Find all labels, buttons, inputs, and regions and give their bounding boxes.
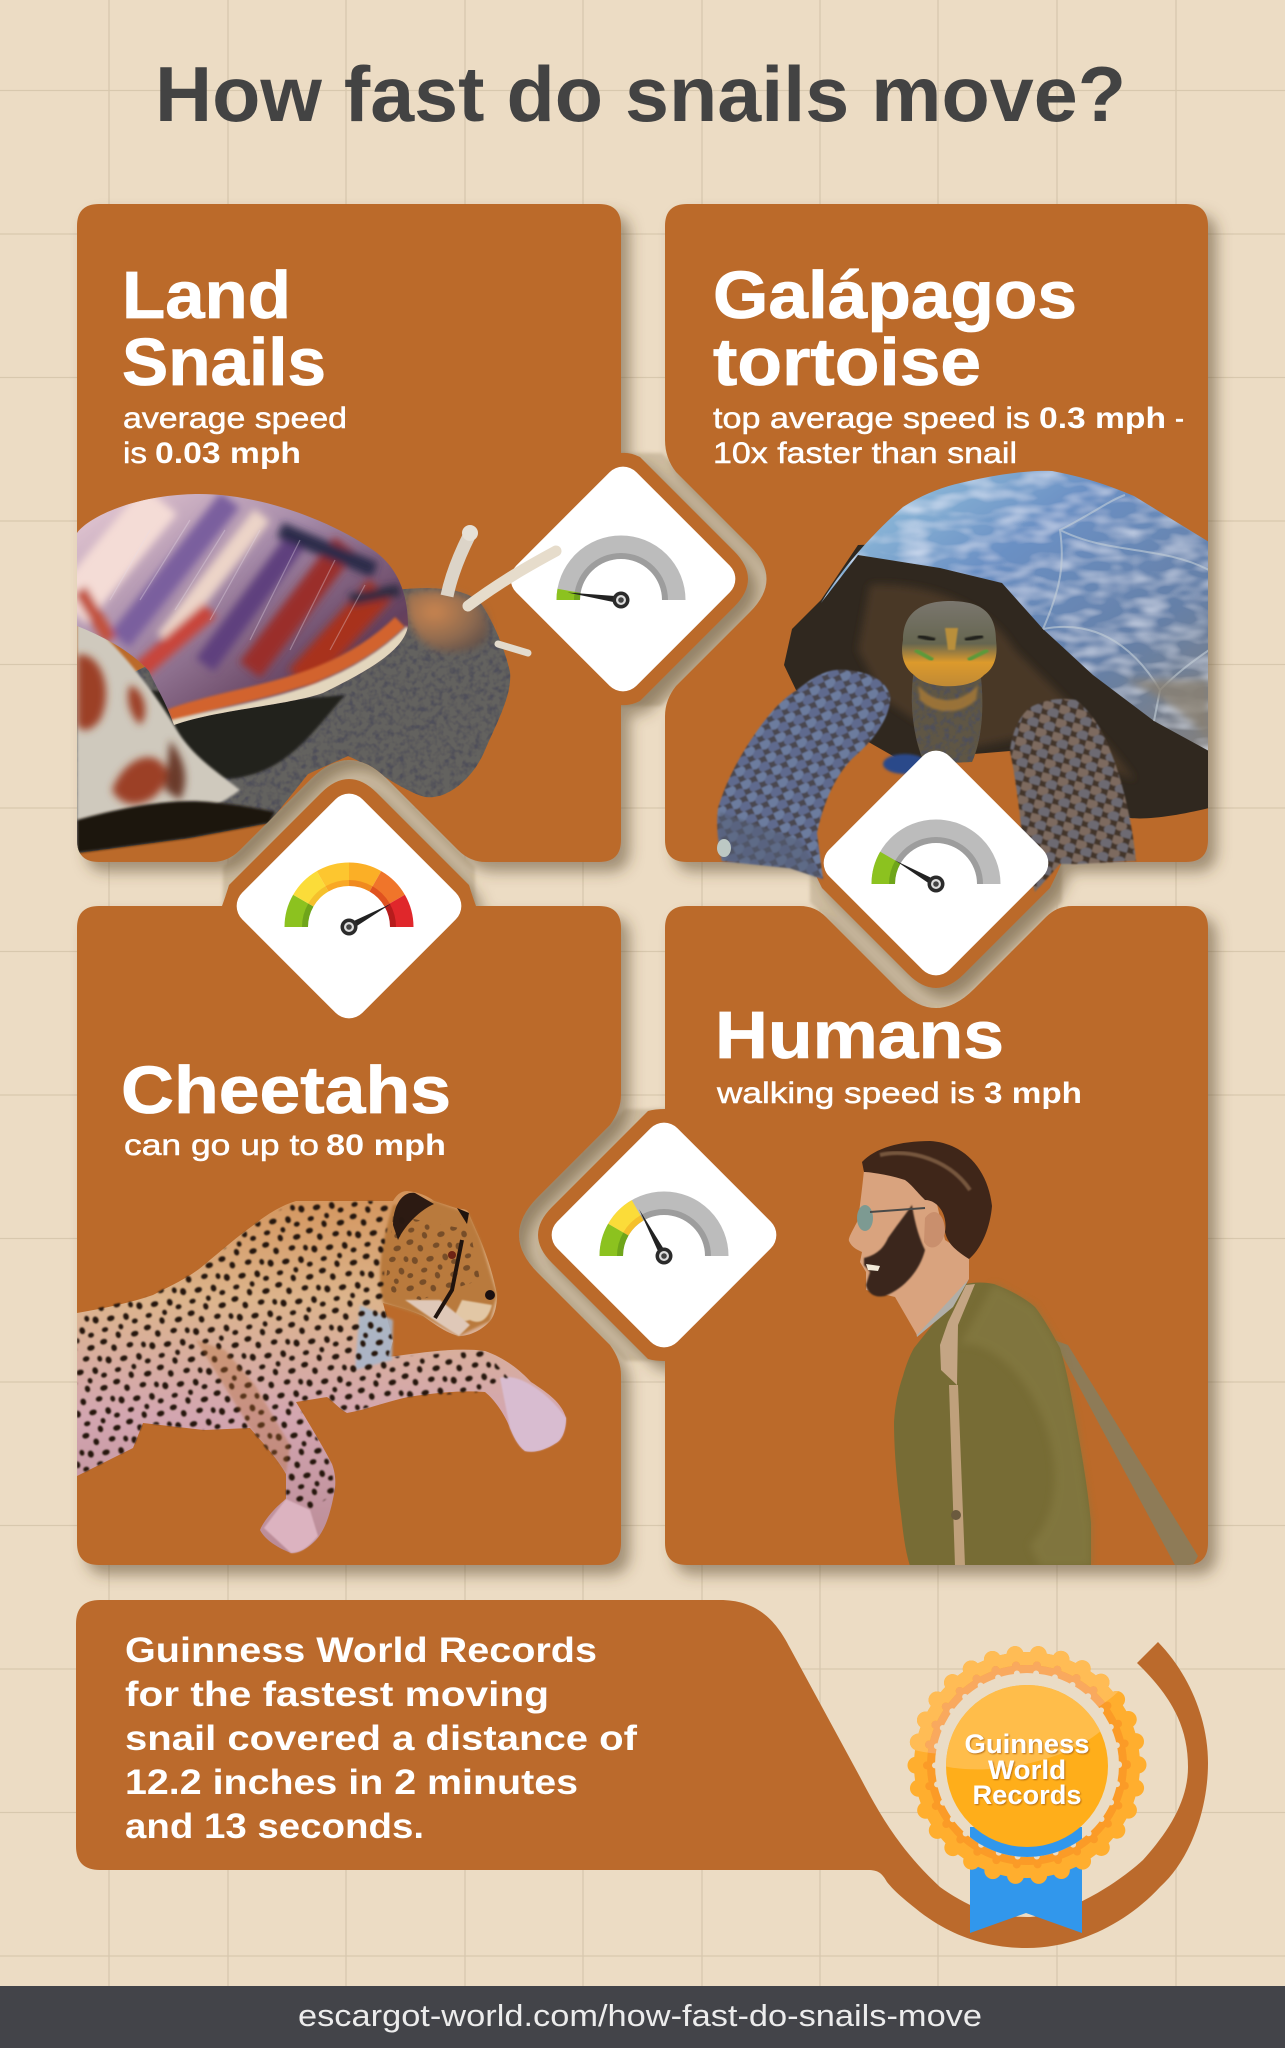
gauge: snail speed xyxy=(566,544,676,608)
brown panels xyxy=(77,204,1208,1565)
callout text xyxy=(125,1631,637,1846)
icon: guinness rosette badge xyxy=(914,1652,1140,1933)
panel: humans text xyxy=(715,998,1082,1110)
panel: tortoise text: - xyxy=(1175,402,1184,435)
panel: humans text: Humans xyxy=(715,998,1004,1073)
panel: humans text: walking speed is xyxy=(716,1077,975,1110)
badge text: Guinness xyxy=(964,1729,1090,1759)
gauge: tortoise speed xyxy=(880,828,992,892)
gauge: human speed xyxy=(608,1200,720,1264)
panel: land snails text: Snails xyxy=(122,325,326,400)
callout text: snail covered a distance of xyxy=(125,1719,637,1758)
panel: cheetahs text xyxy=(121,1053,451,1162)
title: How fast do snails move? xyxy=(155,50,1126,138)
panel: cheetahs text: Cheetahs xyxy=(121,1053,451,1128)
panel: tortoise text xyxy=(713,258,1184,470)
panel: tortoise text: Galápagos xyxy=(713,258,1077,333)
callout: guinness record banner xyxy=(76,1600,1208,1948)
panel: land snails text: is xyxy=(123,437,147,470)
badge text: World xyxy=(988,1755,1066,1785)
badge text: Records xyxy=(972,1780,1082,1810)
gauge diamond: human xyxy=(544,1115,784,1355)
photo: man xyxy=(849,1141,1198,1567)
panel: cheetahs text: can go up to xyxy=(124,1129,319,1162)
snail antennae xyxy=(447,525,556,653)
photo: cheetah xyxy=(77,1191,566,1553)
panel: land snails text: average speed xyxy=(123,402,347,435)
callout text: and 13 seconds. xyxy=(125,1807,424,1846)
callout text: Guinness World Records xyxy=(125,1631,597,1670)
footer url: escargot-world.com/how-fast-do-snails-move xyxy=(298,1998,982,2033)
photo: snail xyxy=(70,494,510,853)
photo: tortoise xyxy=(717,471,1209,892)
gauge: cheetah speed xyxy=(294,872,404,936)
panel: land snails text: 0.03 mph xyxy=(155,437,301,470)
callout text: 12.2 inches in 2 minutes xyxy=(125,1763,578,1802)
callout text: for the fastest moving xyxy=(125,1675,549,1714)
panel: tortoise text: tortoise xyxy=(713,325,981,400)
panel: humans text: 3 mph xyxy=(984,1077,1082,1110)
gauge diamond: cheetah xyxy=(229,786,469,1026)
panel: land snails text xyxy=(122,258,347,470)
notch shadow shapes xyxy=(222,452,1063,1362)
badge text xyxy=(964,1729,1090,1810)
footer bar xyxy=(0,1986,1285,2048)
panel: land snails text: Land xyxy=(122,258,291,333)
gauge diamond: land snail xyxy=(503,459,743,699)
panel: tortoise text: 0.3 mph xyxy=(1039,402,1166,435)
gauge diamond: tortoise xyxy=(816,743,1056,983)
panel: cheetahs text: 80 mph xyxy=(326,1129,446,1162)
panel: tortoise text: top average speed is xyxy=(713,402,1030,435)
panel: tortoise text: 10x faster than snail xyxy=(713,437,1017,470)
